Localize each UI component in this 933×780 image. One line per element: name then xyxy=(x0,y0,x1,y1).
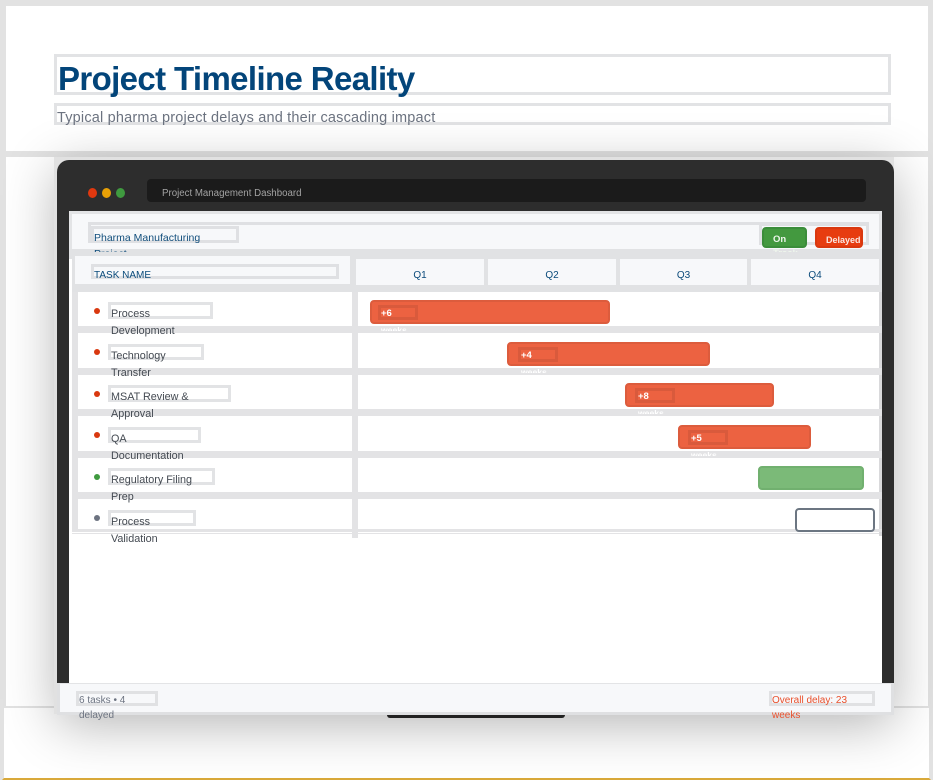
monitor stand xyxy=(387,715,565,718)
task: QA Documentation: QA xyxy=(111,433,127,445)
status dot xyxy=(94,432,100,438)
text: Track xyxy=(773,248,798,259)
device backing xyxy=(54,157,894,714)
quarter: Q1 xyxy=(356,259,484,285)
bar: QA Documentation +5 weeks: +5 xyxy=(691,433,702,444)
status dot xyxy=(94,308,100,314)
gantt grid lines xyxy=(72,292,882,538)
task: Regulatory Filing Prep xyxy=(94,468,215,503)
task name header xyxy=(75,256,350,284)
bar: Process Development +6 weeks xyxy=(370,300,610,324)
text: delayed xyxy=(79,710,114,721)
status dot xyxy=(94,515,100,521)
subtitle xyxy=(54,103,891,125)
quarter: Q3: Q3 xyxy=(677,270,690,281)
task: Regulatory Filing Prep: Regulatory Filing xyxy=(111,474,192,486)
task: Technology Transfer: Technology xyxy=(111,350,166,362)
dashboard header xyxy=(69,211,882,251)
project name xyxy=(94,232,200,252)
task: Regulatory Filing Prep: Prep xyxy=(111,491,134,503)
status dot xyxy=(94,474,100,480)
task: QA Documentation xyxy=(94,427,201,462)
dashboard footer: Overall delay: 23 xyxy=(772,695,847,706)
quarter: Q4 xyxy=(751,259,879,285)
bar: Process Validation xyxy=(795,508,875,532)
legend box xyxy=(759,223,869,245)
task: Process Validation xyxy=(94,510,196,545)
address bar: Project Management Dashboard xyxy=(162,188,301,199)
bar: Regulatory Filing Prep xyxy=(758,466,864,490)
overall delay xyxy=(769,691,875,706)
address bar xyxy=(147,179,866,202)
device shadow xyxy=(57,160,894,714)
quarter: Q4: Q4 xyxy=(808,270,822,281)
bar: QA Documentation +5 weeks xyxy=(678,425,811,449)
task: MSAT Review and Approval: MSAT Review & xyxy=(111,391,189,403)
section divider xyxy=(0,151,933,157)
task: MSAT Review and Approval xyxy=(94,385,231,420)
device body xyxy=(57,160,894,690)
text: weeks xyxy=(772,710,800,721)
bar: Technology Transfer +4 weeks xyxy=(507,342,710,366)
task: Process Validation: Validation xyxy=(111,533,158,545)
task: MSAT Review and Approval: Approval xyxy=(111,408,154,420)
green control xyxy=(116,188,125,198)
gantt header xyxy=(72,252,882,292)
window controls xyxy=(88,188,125,198)
task: Process Development: Development xyxy=(111,325,175,337)
lower section frame xyxy=(2,706,931,780)
bar: MSAT Review +8 weeks: +8 xyxy=(638,391,649,402)
bar: Technology Transfer +4 weeks: +4 xyxy=(521,350,532,361)
amber control xyxy=(102,188,111,198)
status badge: on track xyxy=(762,227,807,248)
status badge: on track: On xyxy=(773,234,786,245)
quarter: Q2 xyxy=(488,259,616,285)
bar: Process Development +6 weeks: +6 xyxy=(381,308,392,319)
quarter: Q3 xyxy=(620,259,747,285)
project name box xyxy=(91,226,239,243)
title xyxy=(54,54,891,95)
subtitle: Typical pharma project delays and their cascading impact xyxy=(57,110,435,126)
title: Project Timeline Reality xyxy=(58,60,415,97)
task: Process Validation: Process xyxy=(111,516,150,528)
status dot xyxy=(94,349,100,355)
red control xyxy=(88,188,97,198)
status dot xyxy=(94,391,100,397)
quarter: Q2: Q2 xyxy=(545,270,559,281)
task: Process Development xyxy=(94,302,213,337)
dashboard footer xyxy=(57,683,894,715)
bar: MSAT Review +8 weeks xyxy=(625,383,774,407)
quarter: Q1: Q1 xyxy=(413,270,427,281)
task summary xyxy=(76,691,158,706)
task: Technology Transfer xyxy=(94,344,204,379)
task: QA Documentation: Documentation xyxy=(111,450,184,462)
status badge: delayed: Delayed xyxy=(826,235,861,245)
dashboard screen xyxy=(69,211,882,683)
task: Process Development: Process xyxy=(111,308,150,320)
project name: Pharma Manufacturing xyxy=(94,232,200,244)
task name header: TASK NAME xyxy=(94,270,151,281)
status badge: delayed xyxy=(815,227,863,248)
dashboard footer: 6 tasks • 4 xyxy=(79,695,125,706)
task: Technology Transfer: Transfer xyxy=(111,367,151,379)
